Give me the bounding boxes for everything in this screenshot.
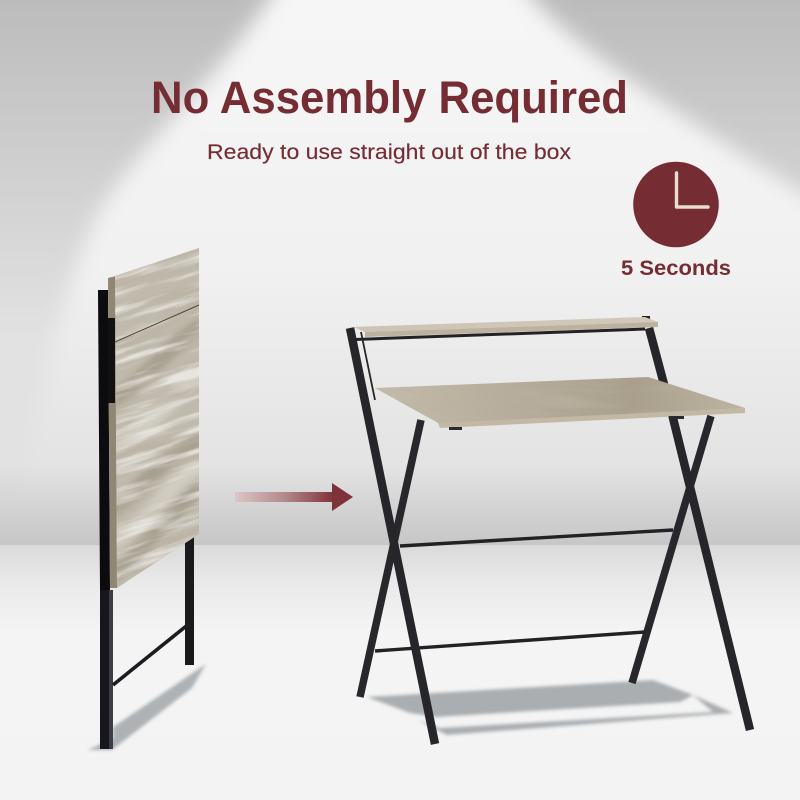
subtitle: Ready to use straight out of the box: [207, 141, 572, 164]
desk crossbars: [375, 530, 673, 651]
folded desk shadow: [88, 664, 206, 750]
shelf support rail: [355, 316, 650, 400]
desk rear legs: [360, 416, 711, 697]
clock label: 5 Seconds: [621, 257, 731, 280]
open desk shadow: [367, 680, 733, 735]
desk top: [370, 375, 750, 430]
desk front legs: [350, 328, 750, 744]
icon: clock: [633, 162, 719, 247]
arrow: [235, 483, 353, 511]
folded desk panel: [108, 248, 200, 588]
folded desk: [88, 248, 206, 752]
folded desk frame: [98, 290, 194, 749]
open desk: [350, 316, 750, 744]
title: No Assembly Required: [151, 72, 628, 123]
upper shelf: [353, 317, 658, 337]
